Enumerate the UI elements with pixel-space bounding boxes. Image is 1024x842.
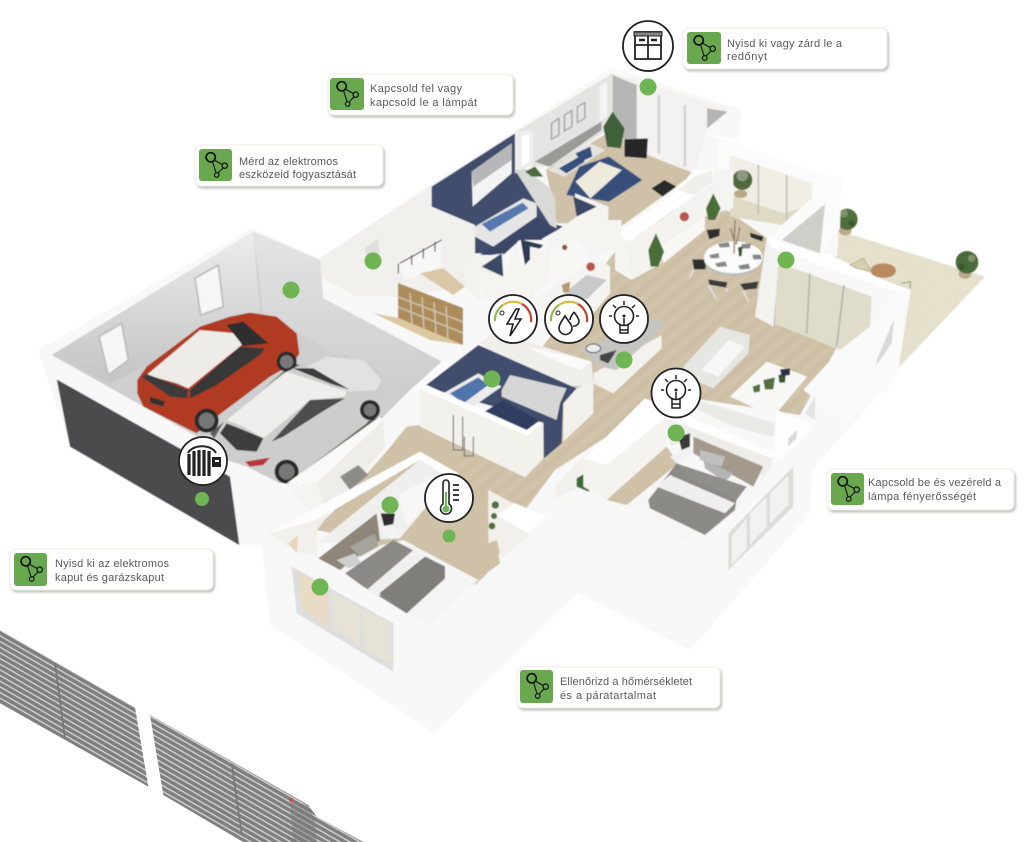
upper kitchen cabinets — [480, 332, 593, 387]
callout: gate and garage door — [10, 549, 213, 590]
icon: light bulb — [600, 295, 648, 343]
west bedroom bed — [318, 513, 445, 613]
callout: temperature and humidity — [517, 667, 720, 708]
icon: electricity meter — [489, 295, 537, 343]
garage back wall — [52, 232, 260, 383]
house exterior walls — [38, 67, 910, 733]
house floor plan — [38, 67, 985, 733]
bathroom navy walls — [432, 130, 563, 255]
east wall with window — [803, 290, 911, 423]
icon: living room light bulb — [652, 368, 700, 418]
white car — [213, 355, 383, 484]
bathroom and wardrobe — [320, 130, 563, 300]
bedroom walls — [268, 452, 458, 557]
wardrobe shelves — [373, 283, 463, 345]
icon: network — [831, 473, 864, 505]
master bedroom — [516, 73, 727, 230]
east wall window — [728, 397, 815, 570]
garage — [52, 232, 460, 545]
callout: shutter — [683, 28, 887, 69]
east bedroom bed — [648, 433, 763, 535]
callout: gate and garage door: kaput és garázskaput — [55, 572, 164, 584]
garage door — [57, 379, 239, 545]
kitchen island — [580, 318, 667, 393]
callout: light dimming: lámpa fényerősségét — [868, 491, 976, 503]
kitchen, lower bathroom, living room and east bedroom — [420, 318, 815, 570]
south window — [292, 567, 393, 672]
dining table with chairs — [689, 220, 763, 302]
callout: energy metering: eszközeid fogyasztását — [239, 169, 356, 181]
icon: gate — [179, 437, 227, 485]
bed with navy blanket — [548, 143, 642, 202]
callout: gate and garage door: Nyisd ki az elektromos — [55, 558, 170, 570]
glass balcony wall — [613, 73, 727, 173]
plants and flowers — [562, 193, 721, 293]
icon: network — [520, 670, 553, 703]
bath tub — [475, 198, 537, 247]
callout: light on off: kapcsold le a lámpát — [370, 97, 477, 109]
callout: light dimming: Kapcsold be és vezéreld a — [868, 477, 1002, 489]
icon: water meter — [545, 295, 593, 343]
icon: network — [14, 553, 47, 586]
terrace — [833, 209, 985, 370]
wardrobe walls — [320, 185, 475, 297]
east bedroom walls — [555, 398, 772, 547]
car shadows — [210, 363, 383, 483]
central wall, cabinets and dining set — [530, 170, 763, 313]
master bedroom back wall — [516, 73, 613, 173]
red car — [137, 313, 299, 433]
sliding gate — [0, 630, 363, 842]
small door and nook — [465, 239, 548, 300]
callout: shutter: Nyisd ki vagy zárd le a — [727, 38, 843, 50]
wooden main floor — [318, 195, 838, 585]
icon: network — [199, 149, 232, 181]
callout: shutter: redőnyt — [727, 51, 767, 63]
icon: network — [330, 78, 364, 110]
plant and black chair — [603, 112, 676, 197]
bedroom floor — [546, 130, 694, 230]
icon: network — [687, 32, 721, 64]
callout: energy metering: Mérd az elektromos — [239, 156, 338, 168]
long central wall — [615, 170, 733, 280]
garage side wall — [253, 232, 442, 393]
west bedroom — [268, 452, 500, 672]
hall block with plants — [488, 490, 570, 558]
sofas and coffee table — [683, 327, 807, 437]
callout: light on off — [328, 74, 513, 115]
callout: energy metering — [195, 145, 383, 186]
callout: light on off: Kapcsold fel vagy — [370, 83, 462, 95]
cabinets, doors and console — [530, 193, 622, 313]
garage windows — [99, 265, 223, 375]
counter wall beside garage — [287, 362, 460, 540]
white south wall block — [470, 488, 728, 650]
callout: temperature and humidity: és a páratartalmat — [560, 690, 656, 702]
living room glass wall — [755, 238, 911, 350]
bathroom with navy tiles — [420, 345, 593, 477]
icon: thermometer — [425, 474, 473, 522]
glass partition wall — [767, 180, 842, 255]
dining glass wall — [718, 140, 842, 225]
dining and living glass walls — [718, 140, 911, 423]
icon: shutter — [623, 21, 673, 71]
bedroom floor — [320, 480, 500, 627]
green sensor dots — [195, 78, 794, 596]
callout: temperature and humidity: Ellenőrizd a hőmérsékletet — [560, 676, 692, 688]
callout: light dimming — [827, 469, 1014, 510]
